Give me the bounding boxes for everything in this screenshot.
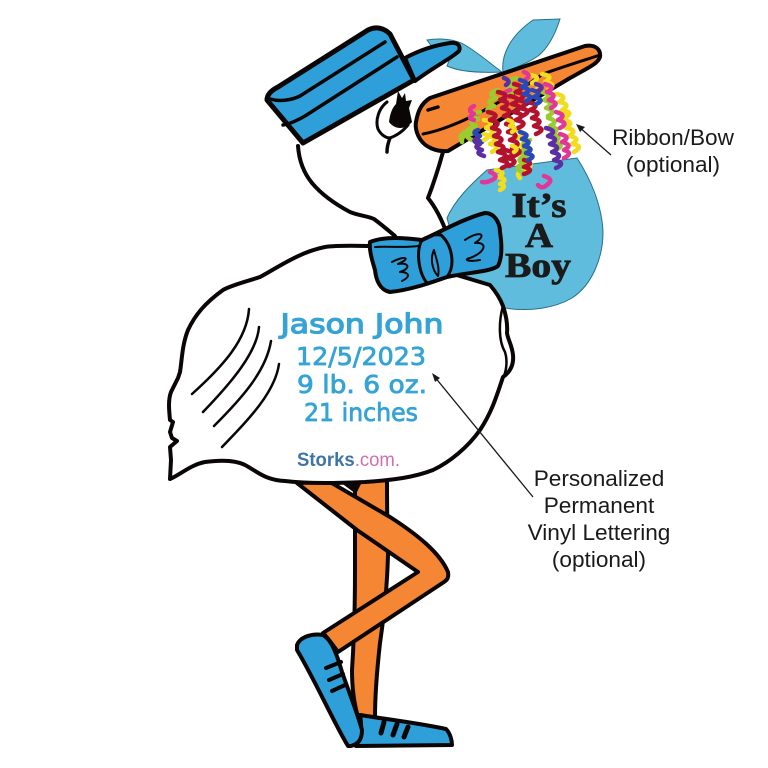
stork head and neck (298, 60, 448, 236)
bag text: It's A Boy (505, 186, 572, 285)
birth length: 21 inches (304, 398, 418, 427)
stork body and wing (169, 246, 513, 483)
callout: ribbon/bow (576, 124, 735, 177)
callout: personalized lettering: Vinyl Lettering (528, 520, 670, 545)
stork beak (416, 46, 600, 151)
callout: personalized lettering: (optional) (552, 547, 646, 572)
stork shoes (297, 634, 452, 746)
baby bundle bag (427, 19, 603, 310)
callout: ribbon/bow: (optional) (626, 152, 720, 177)
birth date: 12/5/2023 (296, 342, 426, 371)
bow tie (370, 213, 501, 292)
stork hat (267, 28, 460, 143)
name: Jason John (278, 309, 444, 340)
stork eye (377, 91, 412, 152)
callout: personalized lettering: Permanent (544, 493, 655, 518)
wing lettering: name and birth details (278, 309, 444, 427)
bag text: It's A Boy: A (525, 216, 554, 255)
callout: personalized lettering (432, 373, 670, 572)
bag text: It's A Boy: It’s (512, 186, 566, 225)
stork legs (297, 480, 448, 717)
bag text: It's A Boy: Boy (505, 246, 572, 285)
callout: personalized lettering: Personalized (534, 466, 664, 491)
callout: ribbon/bow: Ribbon/Bow (612, 125, 735, 150)
birth weight: 9 lb. 6 oz. (297, 370, 427, 399)
Storks.com logo: Storks.com. (297, 450, 400, 471)
curling ribbon bow (461, 72, 579, 190)
